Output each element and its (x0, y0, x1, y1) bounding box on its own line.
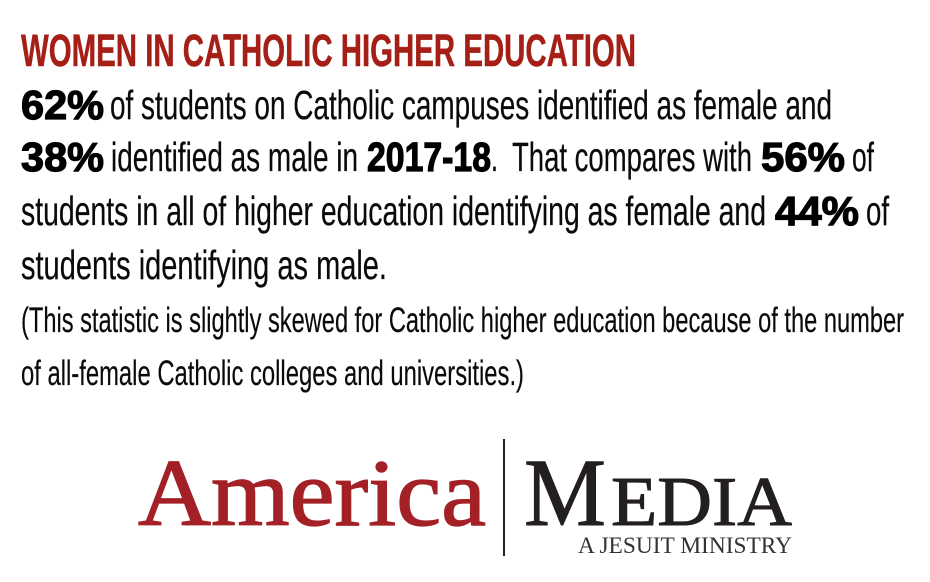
body paragraph: 62% (21, 82, 104, 128)
logo wordmark: America: America (138, 440, 486, 546)
body paragraph: 2017-18 (367, 134, 491, 180)
body paragraph: 44% (775, 188, 859, 234)
body paragraph: students identifying as male. (21, 242, 387, 288)
body paragraph: of (852, 134, 874, 180)
body paragraph: 56% (761, 134, 845, 180)
logo: America Media (138, 439, 792, 558)
logo tagline: A JESUIT MINISTRY (578, 533, 792, 558)
logo wordmark: Media (524, 439, 792, 546)
footnote: of all-female Catholic colleges and universities.) (21, 354, 524, 393)
logo wordmark: Media: M (524, 439, 606, 546)
body paragraph: identified as male in (111, 134, 358, 180)
body paragraph: That compares with (512, 134, 752, 180)
logo divider (503, 439, 505, 556)
body paragraph: 38% (21, 134, 104, 180)
logo wordmark: Media: EDIA (611, 464, 792, 541)
body paragraph: of (866, 188, 889, 234)
footnote (21, 301, 904, 393)
body paragraph (21, 82, 889, 288)
body paragraph: . (491, 134, 498, 180)
